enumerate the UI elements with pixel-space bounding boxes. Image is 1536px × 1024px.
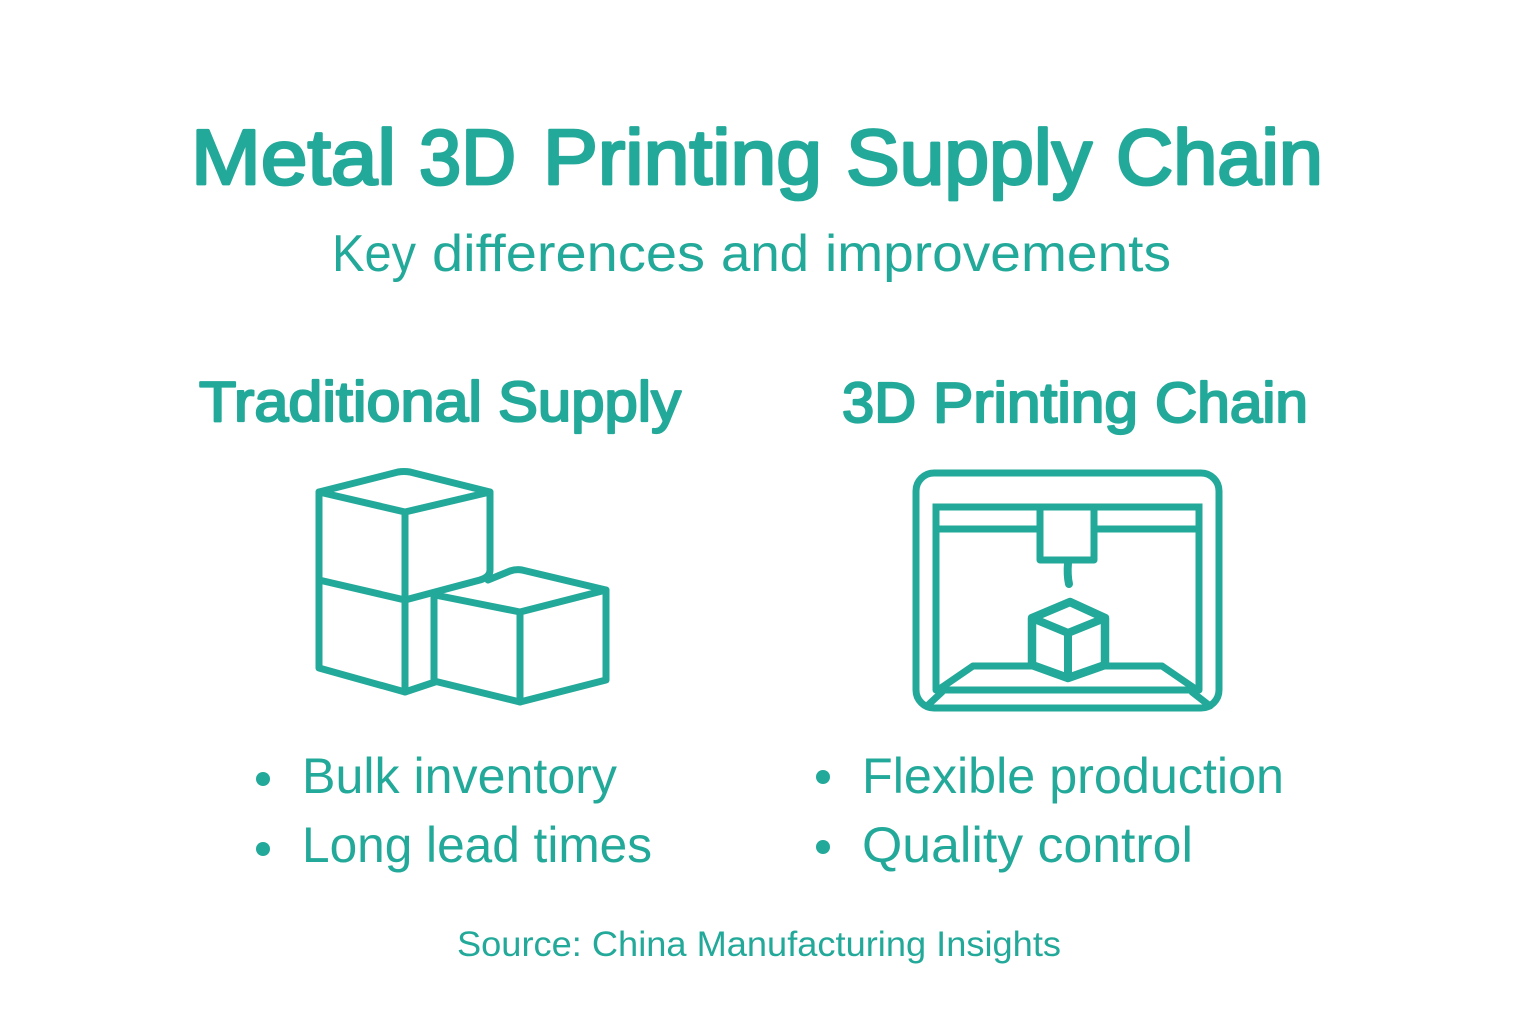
bullet list: 3D printing chain: Quality control: [862, 817, 1193, 873]
subtitle: and: [721, 225, 809, 283]
title: [191, 113, 1323, 201]
title: Printing: [543, 113, 822, 201]
heading: 3D printing chain: [842, 371, 1308, 435]
bullet list: traditional supply: Bulk inventory: [302, 748, 617, 804]
title: Supply: [846, 113, 1092, 201]
bullet list: 3D printing chain: [816, 748, 1284, 873]
bullet list: traditional supply: [256, 748, 652, 873]
heading: traditional supply: Supply: [498, 370, 682, 434]
icon: stacked boxes: [319, 472, 606, 702]
title: 3D: [419, 113, 516, 201]
heading: 3D printing chain: 3D: [842, 371, 916, 435]
icon: 3D printer: [916, 473, 1219, 708]
subtitle: improvements: [825, 225, 1171, 283]
subtitle: [332, 225, 1171, 283]
title: Metal: [191, 113, 396, 201]
title: Chain: [1116, 113, 1323, 201]
source note: Source: China Manufacturing Insights: [457, 925, 1061, 964]
panel: traditional supply: [199, 370, 682, 873]
panel: 3D printing chain: [816, 371, 1308, 873]
bullet list: traditional supply: Long lead times: [302, 817, 652, 873]
subtitle: differences: [432, 225, 705, 283]
heading: traditional supply: [199, 370, 682, 434]
bullet list: 3D printing chain: Flexible production: [862, 748, 1284, 804]
heading: traditional supply: Traditional: [199, 370, 482, 434]
subtitle: Key: [332, 225, 416, 283]
heading: 3D printing chain: Printing: [933, 371, 1138, 435]
heading: 3D printing chain: Chain: [1155, 371, 1308, 435]
